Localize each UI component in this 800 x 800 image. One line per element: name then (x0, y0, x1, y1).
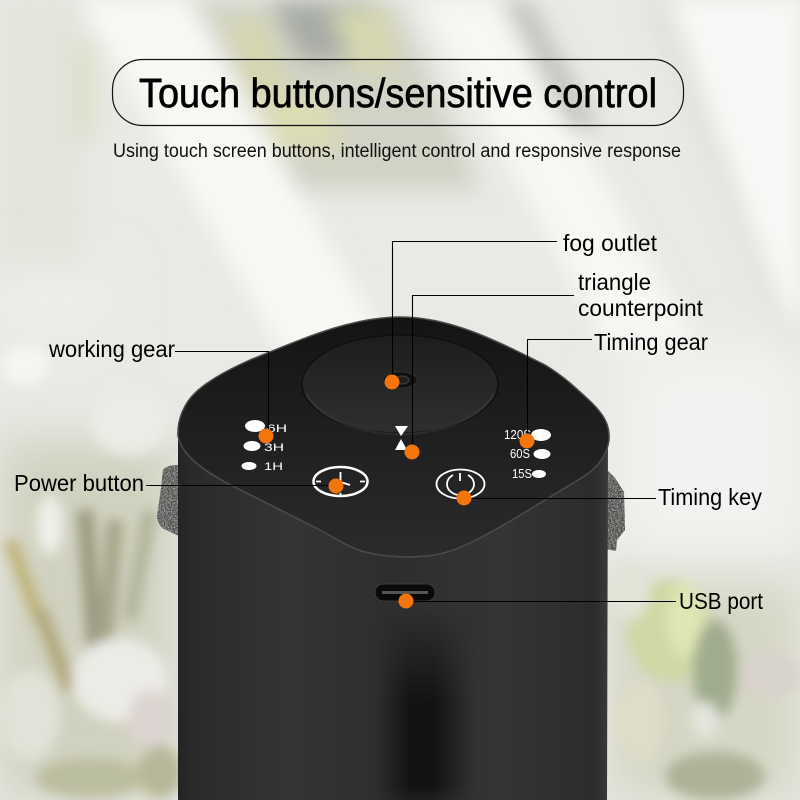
icon: clock power button (314, 467, 368, 497)
subtitle: Using touch screen buttons, intelligent control and responsive response (113, 141, 681, 162)
label: Power button: Power button (14, 470, 144, 496)
timing gear indicators (504, 427, 551, 481)
left plant (0, 345, 182, 798)
label: Timing gear: Timing gear (594, 329, 708, 355)
timing gear indicators: 15S (512, 466, 532, 481)
label: triangle counterpoint: counterpoint (578, 295, 704, 321)
body centre shadow (385, 634, 464, 800)
orange marker dots (258, 374, 534, 608)
fog disc (302, 335, 498, 434)
leader lines (146, 242, 676, 602)
USB port (375, 584, 435, 601)
label: triangle counterpoint: triangle (578, 269, 651, 295)
icon: left side knob (157, 465, 179, 536)
label: Timing key: Timing key (658, 484, 762, 510)
label: triangle counterpoint (578, 269, 704, 321)
triangle counterpoint marks (395, 426, 408, 450)
working gear indicators (242, 420, 287, 473)
timing gear indicators: 60S (510, 446, 530, 461)
fog nozzle (383, 372, 417, 388)
working gear indicators: 3H (264, 442, 284, 454)
working gear indicators: 1H (264, 461, 283, 473)
label: USB port: USB port (679, 588, 764, 614)
title pill (112, 60, 684, 126)
device body (178, 430, 608, 800)
icon: timing key (436, 470, 484, 498)
icon: right side knob (606, 469, 625, 551)
timing gear indicators: 120S (504, 427, 531, 442)
right plant (610, 560, 800, 800)
label: fog outlet: fog outlet (563, 230, 658, 256)
title: Touch buttons/sensitive control (139, 70, 657, 116)
working gear indicators: 6H (267, 423, 287, 435)
device top panel (178, 317, 609, 557)
label: working gear: working gear (48, 336, 175, 362)
